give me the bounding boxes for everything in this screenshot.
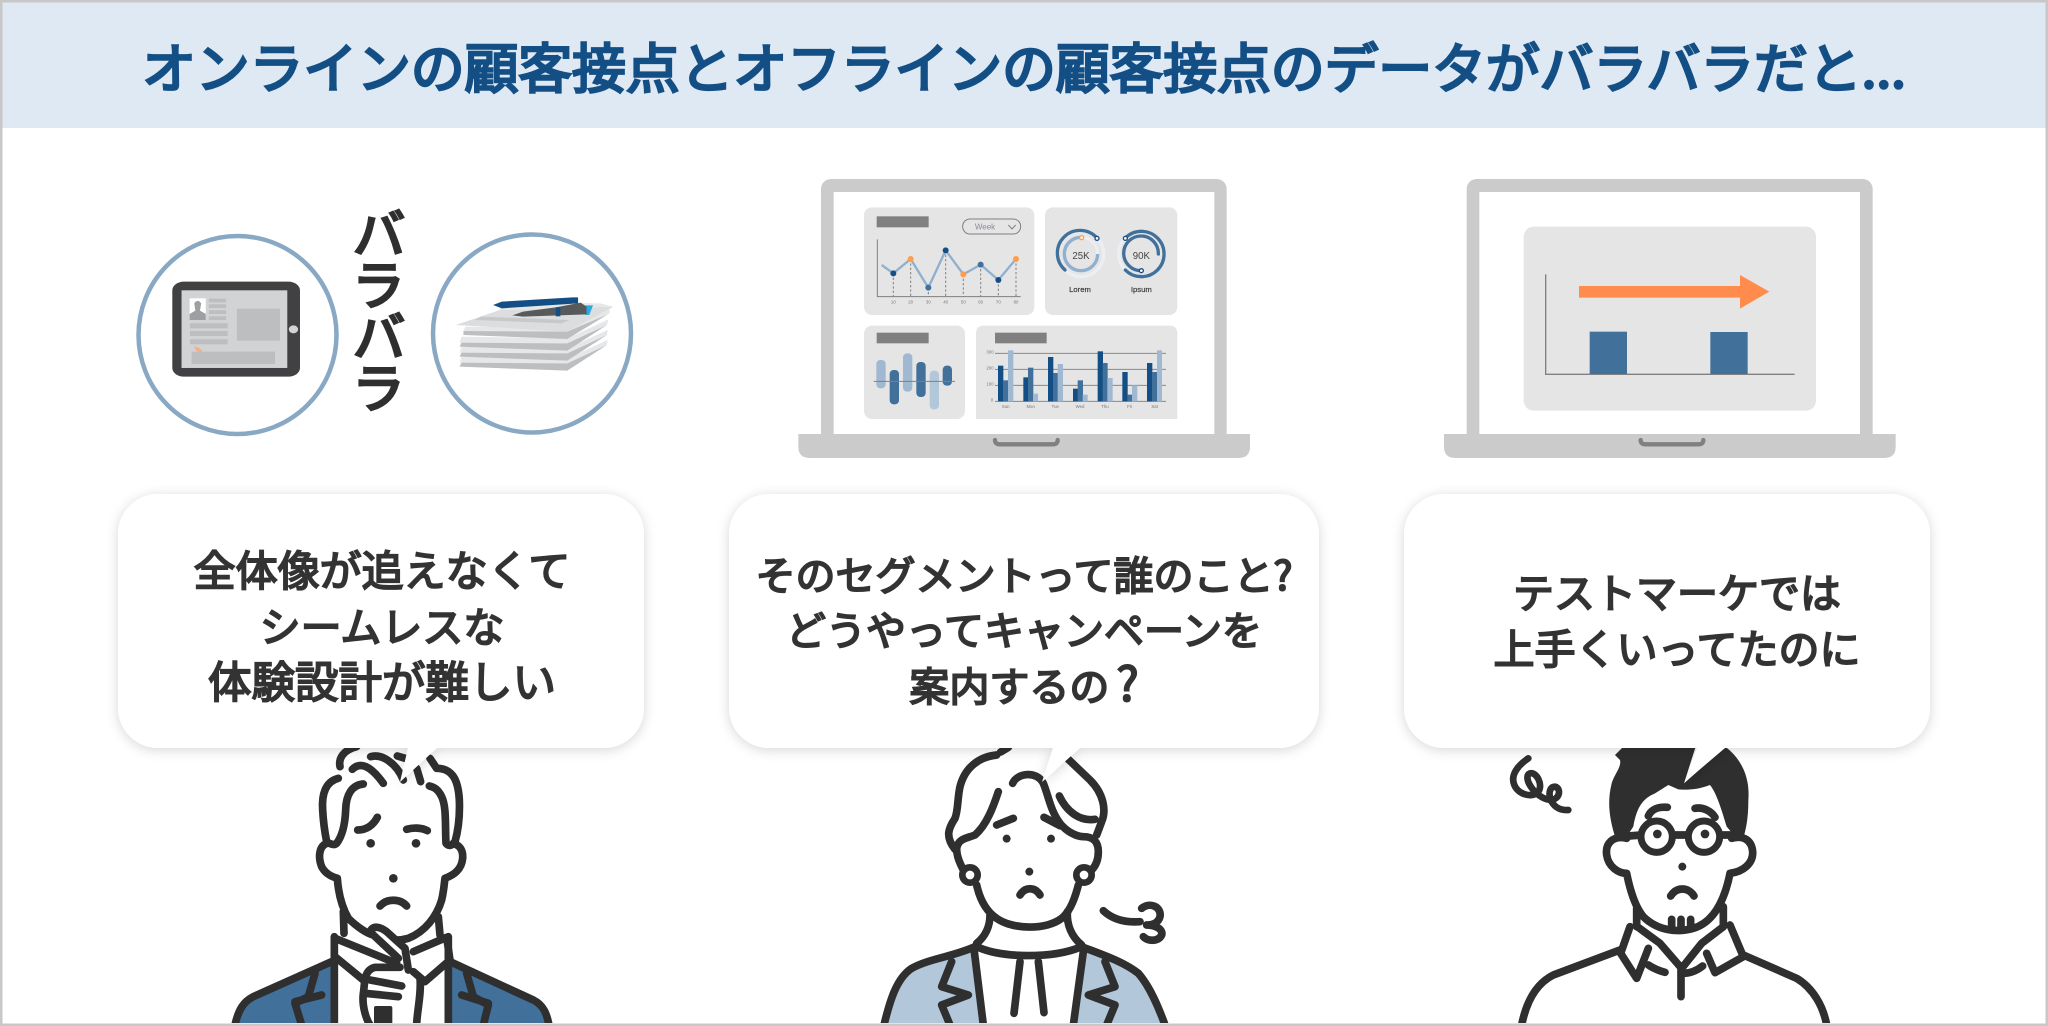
panel: candle chart: [864, 326, 965, 419]
speech bubble 2: [729, 494, 1319, 782]
bubble 1 text: シームレスな: [260, 594, 504, 654]
panel: bar chart: Sun: [1002, 404, 1010, 409]
panel: line chart: Week: [975, 222, 995, 231]
panel: gauges: Ipsum: [1131, 285, 1152, 294]
bubble 3 text: 上手くいってたのに: [1494, 616, 1860, 676]
panel: line chart: 10: [891, 300, 896, 305]
speech bubble 3: [1404, 494, 1930, 782]
bubble 1 text: 全体像が追えなくて: [194, 538, 570, 599]
panel: bar chart: Tue: [1052, 404, 1060, 409]
panel: line chart: 20: [908, 300, 914, 305]
bubble 2 text: そのセグメントって誰のこと?: [756, 544, 1292, 602]
panel: line chart: 50: [961, 300, 966, 305]
panel: line chart: [864, 207, 1034, 315]
speech bubble 1: [118, 494, 644, 782]
bubble 1 text: 体験設計が難しい: [208, 648, 556, 711]
panel: line chart: 70: [996, 300, 1001, 305]
panel: bar chart: 200: [986, 366, 994, 371]
panel: gauges: 90K: [1133, 251, 1150, 262]
person 3: man with glasses: [1513, 743, 1827, 1025]
panel: line chart: 80: [1014, 300, 1019, 305]
bubble 2 text: どうやってキャンペーンを: [786, 599, 1262, 657]
icon: tablet in circle: [138, 236, 336, 434]
bars: [1590, 332, 1748, 374]
title: オンラインの顧客接点とオフラインの顧客接点のデータがバラバラだと...: [142, 25, 1906, 104]
arrow: [1579, 275, 1769, 309]
panel: bar chart: Fri: [1127, 404, 1132, 409]
panel: gauges: 25K: [1072, 251, 1090, 262]
vertical text: バラバラ: バラバラ: [340, 206, 418, 412]
person 2: woman with sigh: [884, 747, 1165, 1025]
panel: line chart: 30: [926, 300, 931, 305]
laptop: analytics dashboard: [798, 179, 1250, 458]
panel: bar chart: 100: [986, 382, 994, 387]
panel: gauges: Lorem: [1069, 285, 1091, 294]
panel: bar chart: Sat: [1151, 404, 1159, 409]
panel: line chart: 60: [978, 300, 984, 305]
panel: bar chart: [976, 326, 1177, 419]
bubble 2 text: 案内するの?: [909, 646, 1139, 715]
bubble 3 text: テストマーケでは: [1513, 560, 1841, 620]
icon: paper stack with pens in circle: [433, 234, 631, 432]
panel: gauges: [1045, 207, 1177, 315]
panel: bar chart: 300: [986, 350, 994, 355]
laptop: test marketing chart: [1444, 179, 1896, 458]
title banner: [0, 0, 2048, 128]
panel: line chart: 40: [943, 300, 949, 305]
panel: bar chart: Thu: [1101, 404, 1109, 409]
person 1: thinking man in blue suit: [235, 747, 549, 1026]
panel: bar chart: Mon: [1026, 404, 1035, 409]
panel: bar chart: 0: [991, 398, 994, 403]
panel: bar chart: Wed: [1076, 404, 1085, 409]
